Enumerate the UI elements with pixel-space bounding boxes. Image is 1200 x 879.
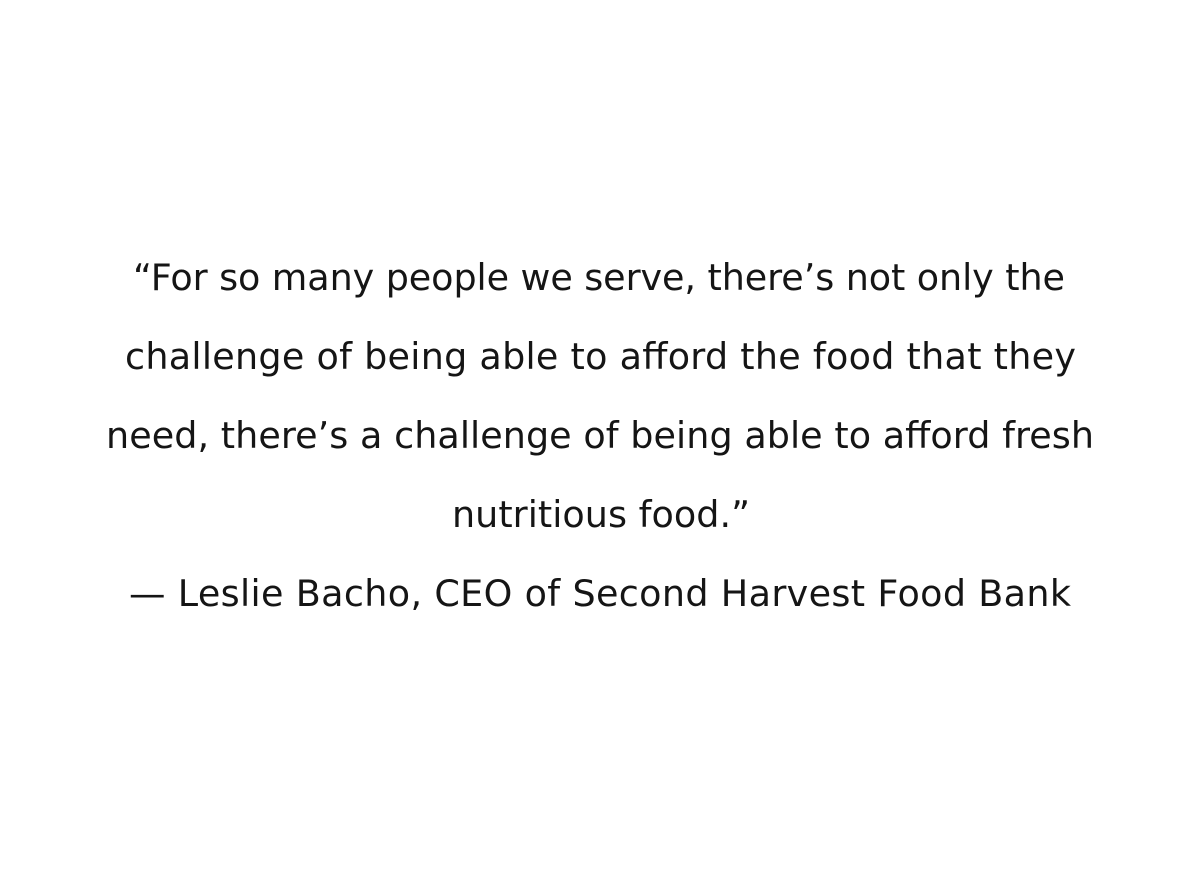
- quote line 4: nutritious food.”: [452, 493, 750, 536]
- quote block: [106, 256, 1094, 615]
- attribution: — Leslie Bacho, CEO of Second Harvest Food Bank: [129, 572, 1072, 615]
- quote line 3: need, there’s a challenge of being able to afford fresh: [106, 414, 1094, 457]
- quote line 2: challenge of being able to afford the food that they: [125, 335, 1076, 378]
- quote line 1: “For so many people we serve, there’s not only the: [133, 256, 1065, 299]
